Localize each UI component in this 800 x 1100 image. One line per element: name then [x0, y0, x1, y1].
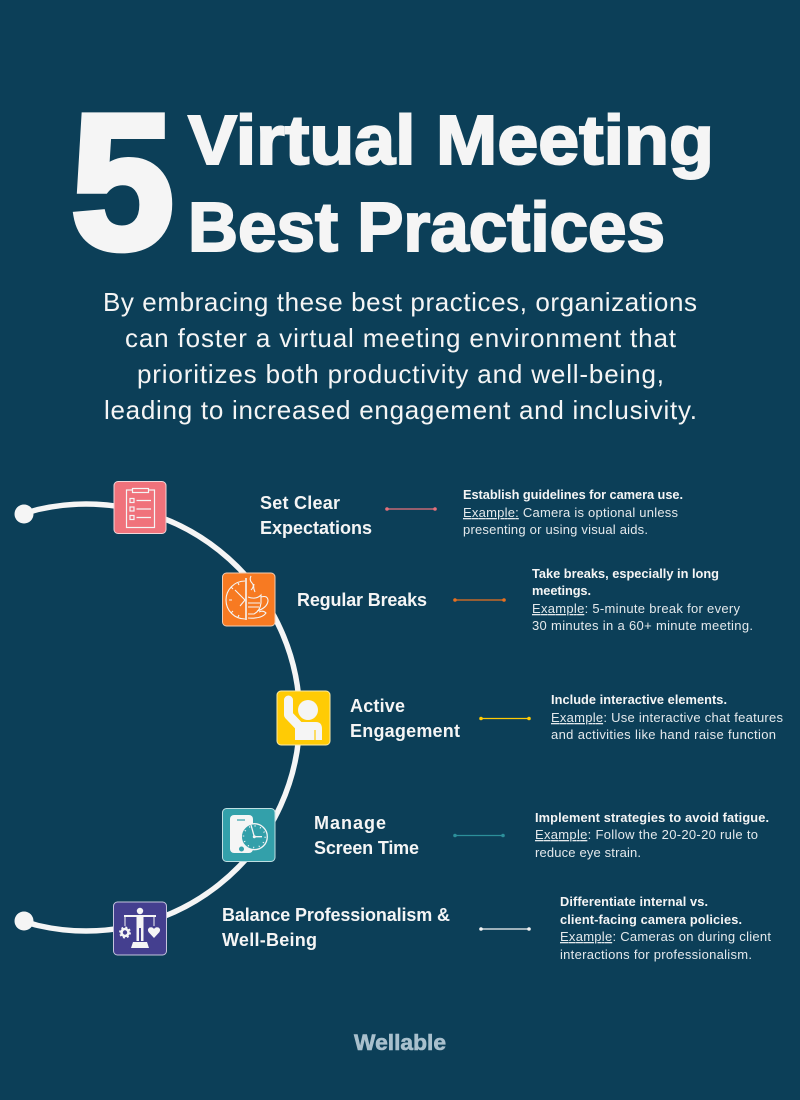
label — [314, 813, 419, 858]
label: Regular Breaks — [297, 590, 427, 610]
connector — [453, 598, 506, 602]
description — [532, 566, 753, 633]
description: 30 minutes in a 60+ minute meeting. — [532, 618, 753, 633]
label: Manage — [314, 813, 386, 833]
intro text: can foster a virtual meeting environment that — [125, 323, 677, 353]
label: Active — [350, 696, 405, 716]
label — [260, 493, 372, 538]
connector — [479, 927, 531, 931]
label — [222, 905, 450, 950]
label: Balance Professionalism & — [222, 905, 450, 925]
step 5: balance professionalism and well-being — [114, 894, 771, 962]
icon: clock and coffee cup — [222, 573, 275, 626]
description — [463, 487, 683, 537]
step 2: regular breaks — [222, 566, 753, 633]
label: Well-Being — [222, 930, 317, 950]
description: Example: Camera is optional unless — [463, 505, 678, 520]
label: Set Clear — [260, 493, 340, 513]
description: reduce eye strain. — [535, 845, 641, 860]
label — [350, 696, 460, 741]
description: Example: Use interactive chat features — [551, 710, 784, 725]
icon: scale with gear and heart — [114, 902, 166, 955]
description: Differentiate internal vs. — [560, 894, 708, 909]
step 3: active engagement — [277, 691, 784, 745]
description: client-facing camera policies. — [560, 912, 742, 927]
logo: Wellable: Wellable — [354, 1030, 446, 1055]
description: Take breaks, especially in long — [532, 566, 719, 581]
icon: clipboard — [114, 482, 166, 534]
title line 1: Virtual Meeting — [188, 101, 714, 179]
description — [560, 894, 771, 962]
description: interactions for professionalism. — [560, 947, 752, 962]
description: Example: Cameras on during client — [560, 929, 771, 944]
icon: person raising hand — [277, 691, 330, 745]
connector — [385, 507, 437, 511]
description: Establish guidelines for camera use. — [463, 487, 683, 502]
title line 2: Best Practices — [188, 188, 665, 266]
description: presenting or using visual aids. — [463, 522, 648, 537]
connector — [453, 834, 505, 837]
description: Implement strategies to avoid fatigue. — [535, 810, 769, 825]
description: Example: Follow the 20-20-20 rule to — [535, 827, 758, 842]
curved timeline — [14, 504, 300, 931]
description — [535, 810, 769, 860]
intro text — [103, 287, 697, 425]
description: and activities like hand raise function — [551, 727, 776, 742]
label: Engagement — [350, 721, 460, 741]
description: Example: 5-minute break for every — [532, 601, 740, 616]
intro text: By embracing these best practices, organizations — [103, 287, 697, 317]
description: Include interactive elements. — [551, 692, 727, 707]
description — [551, 692, 784, 742]
description: meetings. — [532, 583, 591, 598]
step 1: set clear expectations — [114, 482, 683, 538]
big number 5: 5 — [71, 74, 174, 289]
title — [71, 74, 714, 289]
icon: phone with clock — [222, 808, 275, 862]
step 4: manage screen time — [222, 808, 769, 862]
label: Expectations — [260, 518, 372, 538]
connector — [479, 717, 531, 720]
intro text: prioritizes both productivity and well-being, — [137, 359, 664, 389]
label: Screen Time — [314, 838, 419, 858]
intro text: leading to increased engagement and inclusivity. — [104, 395, 697, 425]
